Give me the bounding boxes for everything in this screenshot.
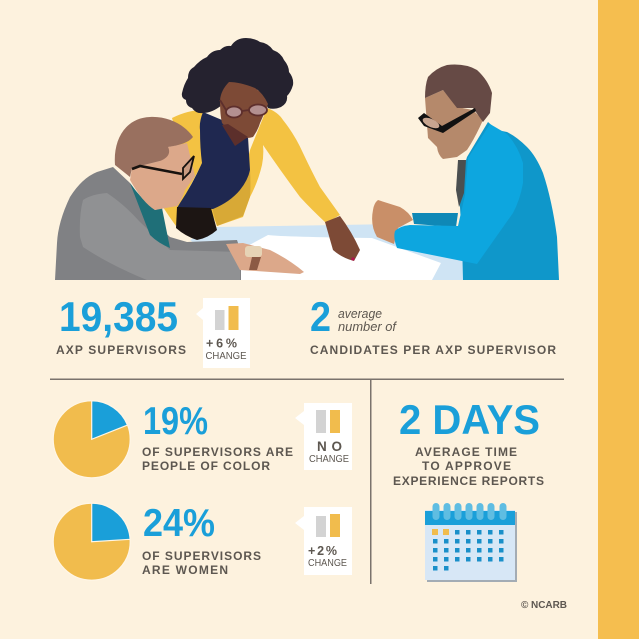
stat: 2 candidates per supervisor: CANDIDATES PER AXP SUPERVISOR (310, 343, 556, 357)
change callout: +2% (295, 507, 352, 575)
right man: far arm (412, 213, 458, 227)
change callout: no change (295, 403, 352, 470)
woman: glasses (220, 100, 267, 118)
stat: 19,385 AXP supervisors: 19,385 (59, 293, 178, 340)
left man: jacket highlight (80, 193, 240, 280)
change callout: no change: NO (317, 439, 342, 454)
stat: 19% people of color: 19% (143, 400, 208, 443)
stat: 19,385 AXP supervisors: AXP SUPERVISORS (56, 343, 186, 357)
stat: 2 candidates per supervisor: 2 (310, 293, 331, 340)
right man: hand (372, 200, 413, 244)
side band (598, 0, 639, 639)
stat: 24% women (142, 502, 261, 577)
pie chart: 19% (53, 401, 130, 478)
stat: 19% people of color: OF SUPERVISORS ARE (142, 445, 293, 459)
stat: 24% women: 24% (143, 502, 215, 545)
right man: arm (394, 124, 523, 264)
left man: gray jacket (55, 167, 241, 280)
woman: cardigan shadow (212, 170, 250, 226)
right man: hair (425, 65, 492, 122)
left man: watch (245, 246, 262, 270)
change callout: +6% (196, 298, 250, 368)
left man: face (130, 143, 195, 210)
stat: 2 days: AVERAGE TIME (415, 445, 517, 459)
woman: navy top (177, 112, 250, 209)
left man: glasses (132, 156, 194, 179)
change callout: no change: CHANGE (309, 454, 349, 465)
stat: 2 days: EXPERIENCE REPORTS (393, 474, 544, 488)
stat: 24% women: ARE WOMEN (142, 563, 228, 577)
woman: black cuff (176, 207, 217, 240)
change callout: +6%: CHANGE (206, 351, 247, 362)
icon: calendar (425, 503, 517, 582)
stat: 24% women: OF SUPERVISORS (142, 549, 261, 563)
stat: 19% people of color: PEOPLE OF COLOR (142, 459, 270, 473)
right man: glasses (418, 108, 476, 133)
woman: hand (325, 216, 360, 261)
right man: tie (456, 160, 466, 207)
woman: hair (182, 38, 293, 113)
change callout: +2%: CHANGE (308, 558, 347, 569)
left man: teal shirt (130, 183, 170, 248)
woman: yellow cardigan (163, 108, 340, 226)
horizontal divider (50, 378, 564, 380)
copyright: © NCARB (521, 600, 567, 611)
pie chart: 24% (53, 503, 130, 580)
left man: hair (115, 117, 193, 177)
change callout: +6%: +6% (206, 336, 237, 350)
table (190, 224, 463, 280)
stat: 2 candidates per supervisor (310, 293, 556, 357)
stat: 2 candidates per supervisor: average (338, 307, 382, 321)
woman: fingernail (351, 257, 355, 261)
stat: 2 days: TO APPROVE (422, 459, 511, 473)
vertical divider (370, 380, 372, 584)
stat: 2 days (393, 396, 544, 488)
paper (240, 235, 441, 280)
change callout: +2%: +2% (308, 544, 337, 558)
woman: face (220, 82, 268, 138)
woman: neck (222, 124, 248, 146)
right man: jacket (457, 122, 559, 280)
right man: face (425, 90, 483, 159)
stat: 2 days: 2 DAYS (399, 396, 540, 443)
stat: 19% people of color (142, 400, 293, 473)
stat: 2 candidates per supervisor: number of (338, 320, 398, 334)
illustration: three people at a table (55, 38, 559, 280)
left man: hand (226, 243, 304, 274)
